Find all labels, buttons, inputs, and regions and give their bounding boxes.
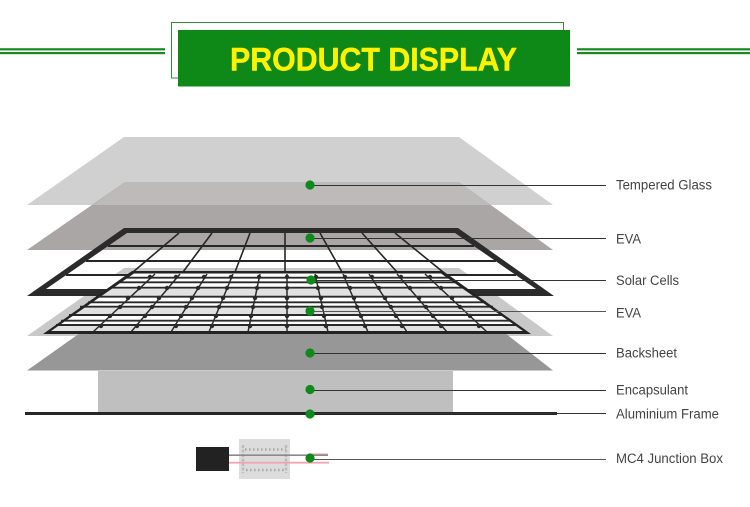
layer: lower EVA: [27, 268, 553, 336]
layer: encapsulant: [98, 371, 453, 412]
layer: solar cell grid frame: [27, 228, 554, 296]
layer: aluminium frame bar: [25, 412, 557, 415]
leader line: EVA upper: [310, 238, 606, 240]
label: aluminium frame: Aluminium Frame: [616, 406, 719, 422]
leader line: EVA lower: [310, 310, 606, 312]
label: EVA lower: EVA: [616, 306, 641, 320]
label: encapsulant: Encapsulant: [616, 382, 688, 398]
layer: backsheet: [27, 333, 553, 370]
leader line: solar cells: [310, 280, 606, 282]
label: EVA upper: EVA: [616, 232, 641, 246]
solar panel module: [43, 271, 531, 334]
leader line: encapsulant: [310, 390, 606, 392]
leader line: tempered glass: [310, 184, 606, 186]
layer: upper EVA: [27, 182, 553, 250]
header banner: [0, 22, 750, 86]
leader line: junction box: [310, 458, 606, 460]
layer: tempered glass: [27, 137, 553, 205]
labels: [616, 178, 723, 466]
title: PRODUCT DISPLAY: [230, 42, 517, 78]
label: tempered glass: Tempered Glass: [616, 178, 712, 192]
icon: MC4 junction box: [196, 439, 329, 479]
label: MC4 junction box: MC4 Junction Box: [616, 451, 723, 466]
label: solar cells: Solar Cells: [616, 273, 679, 288]
leader line: backsheet: [310, 352, 606, 354]
leader line: aluminium frame: [310, 412, 606, 414]
label: backsheet: Backsheet: [616, 346, 677, 360]
marker dots: [305, 180, 316, 463]
